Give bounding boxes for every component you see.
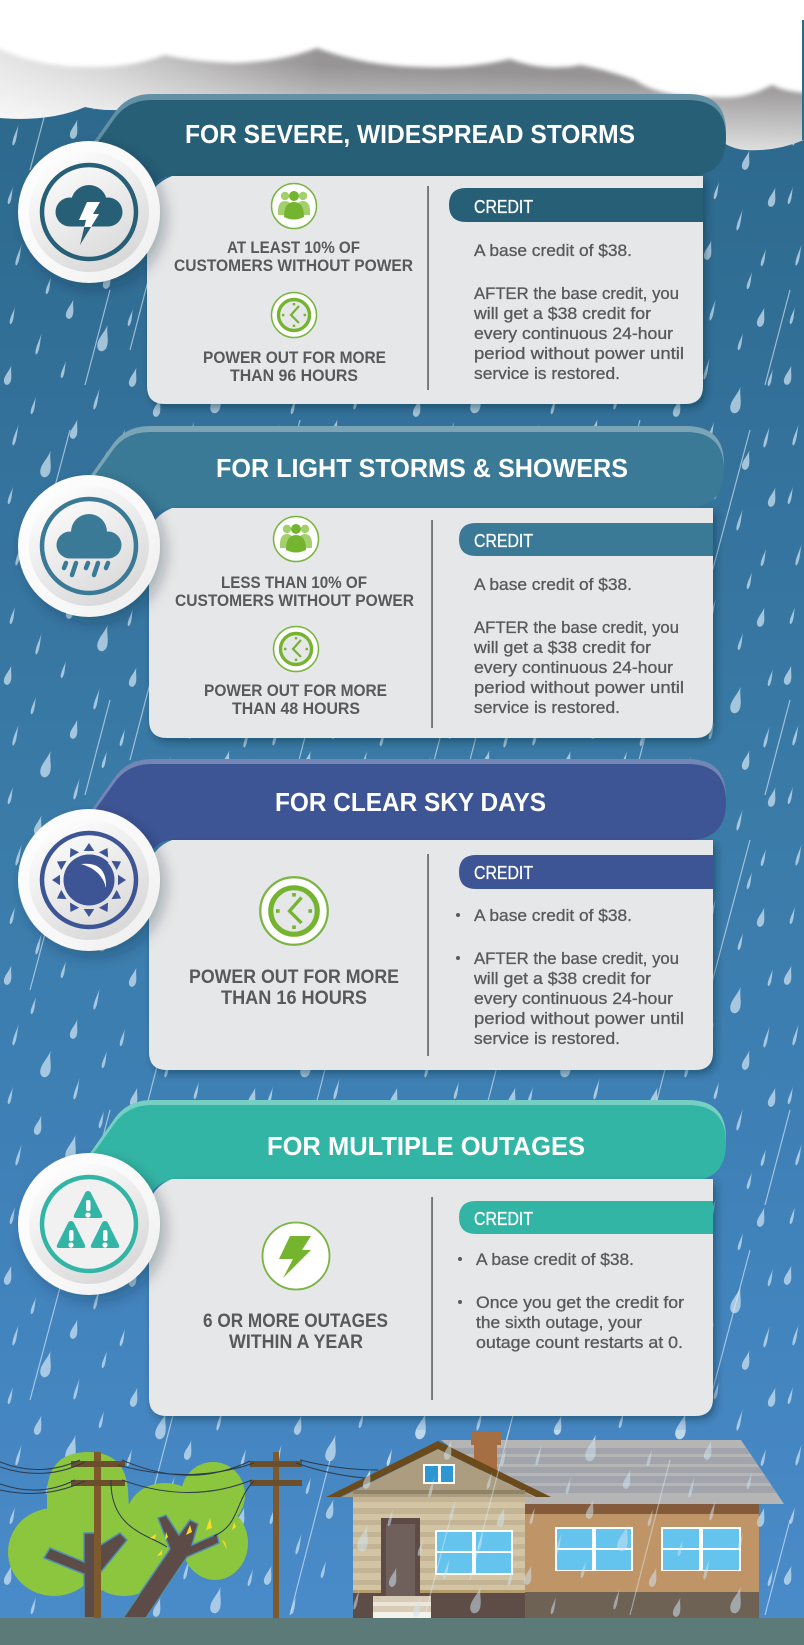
right edge line [802,20,804,140]
card body [149,1179,713,1416]
duration text: POWER OUT FOR MORE [203,349,386,367]
credit text: A base credit of $38. [476,1251,634,1269]
steps [373,1596,431,1618]
credit text: A base credit of $38. [474,242,632,260]
credit text: AFTER the base credit, you [474,950,679,968]
icon: clock [260,877,328,945]
credit text: service is restored. [474,699,620,717]
utility poles [71,1452,302,1618]
duration text: THAN 96 HOURS [230,367,358,385]
outage count text: 6 OR MORE OUTAGES [203,1311,388,1332]
icon: rain cloud badge [18,475,160,617]
credit tab [459,855,713,889]
credit text: every continuous 24-hour [474,990,674,1008]
right roof [441,1440,784,1504]
credit text: the sixth outage, your [476,1314,643,1332]
credit text: every continuous 24-hour [474,325,674,343]
icon: clock [274,626,318,672]
credit tab [449,188,703,222]
credit tab [459,523,713,556]
credit text: AFTER the base credit, you [474,619,679,637]
credit text: service is restored. [474,1030,620,1048]
header: clear sky [88,759,726,889]
illustration: house [326,1432,791,1618]
outage count text [203,1311,388,1353]
criterion text [174,239,413,275]
duration text [189,967,399,1009]
header: severe storms [88,94,726,225]
icon: clock [272,292,316,338]
credit tab: CREDIT [474,531,533,551]
icon: warning triangles badge [18,1153,160,1295]
illustration: trees and power lines [0,1452,378,1618]
header: multiple outages: FOR MULTIPLE OUTAGES [267,1131,585,1161]
credit text: will get a $38 credit for [473,970,652,988]
credit text [456,907,684,1048]
window: right one [555,1527,633,1571]
criterion text: LESS THAN 10% OF [221,574,367,592]
window: right two [661,1527,741,1571]
card body [149,840,713,1070]
duration text: THAN 16 HOURS [221,988,367,1009]
storm clouds [0,0,804,150]
credit text [458,1251,685,1352]
credit text: period without power until [474,345,684,363]
credit text: Once you get the credit for [476,1294,685,1312]
credit tab: CREDIT [474,863,533,883]
power wires [0,1460,378,1547]
criterion text: CUSTOMERS WITHOUT POWER [174,257,413,275]
credit text: service is restored. [474,365,620,383]
duration text [203,349,386,385]
icon: customers [272,184,316,228]
gable wall [342,1449,534,1497]
left siding [353,1490,525,1593]
credit text [473,576,684,717]
credit tab: CREDIT [474,1209,533,1229]
right wall [525,1513,759,1593]
duration text: THAN 48 HOURS [232,700,360,718]
header: light storms: FOR LIGHT STORMS & SHOWERS [216,453,628,483]
rain over house [353,1430,759,1618]
duration text [204,682,387,718]
icon: sun badge [18,809,160,951]
gable roof [326,1441,551,1497]
header: light storms [86,426,724,557]
panel: severe storms [18,94,726,404]
credit text: will get a $38 credit for [473,639,652,657]
duration text: POWER OUT FOR MORE [189,967,399,988]
criterion text: AT LEAST 10% OF [227,239,360,257]
criterion text [175,574,414,610]
sparks [150,1518,236,1556]
door [381,1518,420,1596]
credit text: AFTER the base credit, you [474,285,679,303]
card body [147,176,703,404]
attic window [423,1464,455,1484]
icon: storm cloud badge [18,141,160,283]
outage count text: WITHIN A YEAR [229,1332,363,1353]
credit text: will get a $38 credit for [473,305,652,323]
tree foliage [8,1452,248,1596]
ground [0,1618,804,1645]
tree trunks [44,1515,219,1618]
credit text [473,242,684,383]
criterion text: CUSTOMERS WITHOUT POWER [175,592,414,610]
chimney [471,1432,501,1470]
panel: multiple outages [18,1100,726,1416]
header: multiple outages [88,1100,726,1230]
credit text: every continuous 24-hour [474,659,674,677]
credit text: period without power until [474,679,684,697]
credit tab: CREDIT [474,197,533,217]
duration text: POWER OUT FOR MORE [204,682,387,700]
credit text: outage count restarts at 0. [476,1334,683,1352]
header: severe storms: FOR SEVERE, WIDESPREAD STORMS [185,119,635,149]
card body [149,508,713,738]
header: clear sky: FOR CLEAR SKY DAYS [275,787,546,817]
icon: lightning bolt [262,1222,330,1290]
credit tab [459,1201,713,1234]
credit text: period without power until [474,1010,684,1028]
icon: customers [274,516,318,562]
window: porch [435,1530,513,1575]
panel: clear sky days [18,759,726,1070]
panel: light storms [18,426,724,738]
credit text: A base credit of $38. [474,576,632,594]
credit text: A base credit of $38. [474,907,632,925]
